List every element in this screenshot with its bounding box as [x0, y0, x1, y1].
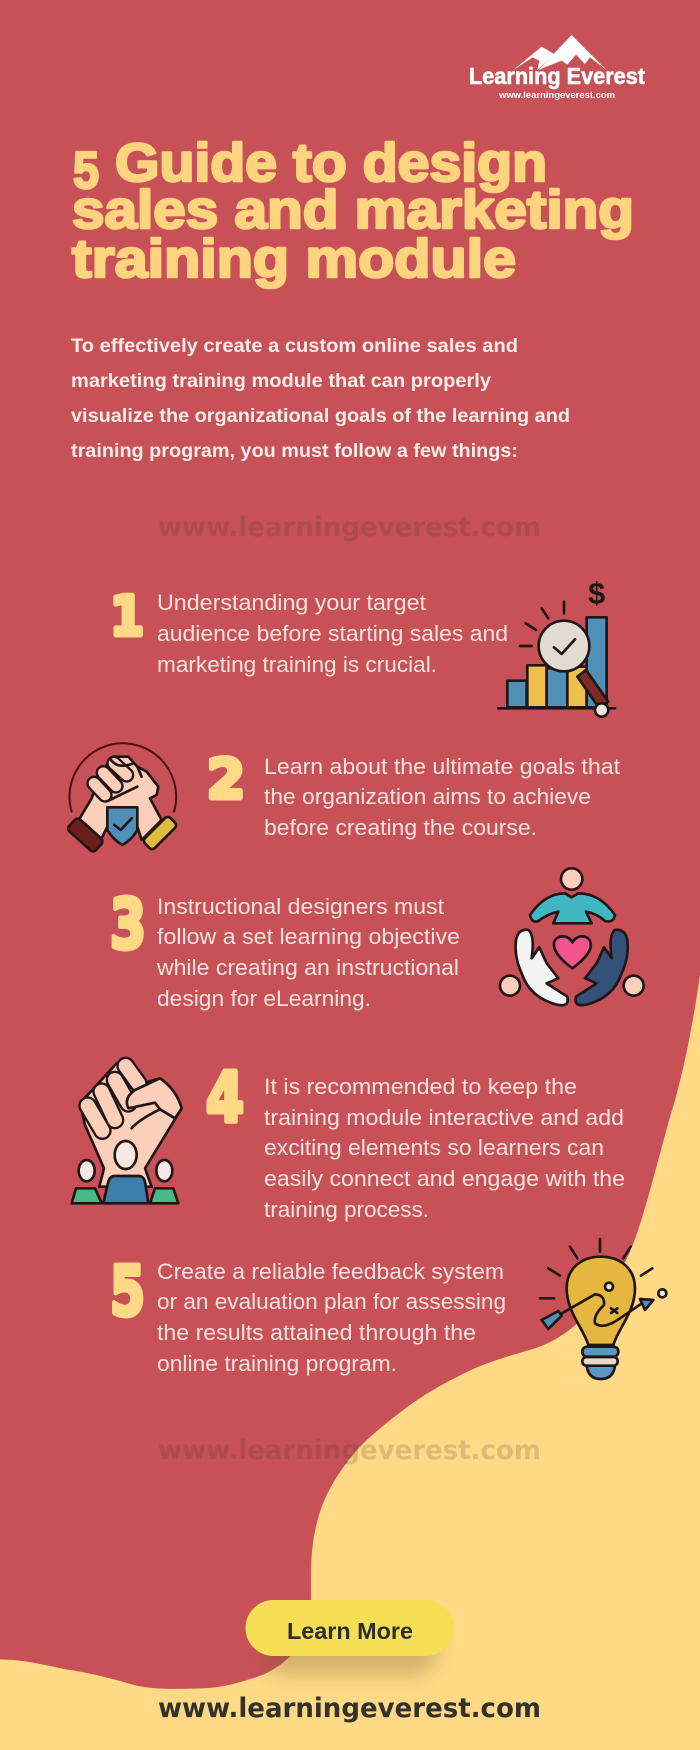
intro paragraph: visualize the organizational goals of the learning and: [71, 405, 570, 427]
logo url: www.learningeverest.com: [498, 90, 615, 100]
button: Learn More: [246, 1600, 454, 1675]
step 4 text: training process.: [264, 1197, 429, 1222]
number 2: 2: [207, 748, 245, 811]
title: [72, 133, 634, 289]
step 1 text: audience before starting sales and: [157, 621, 508, 646]
icon: bar chart with magnifier: $: [588, 576, 605, 610]
step 3 text: [156, 894, 460, 1011]
button: Learn More: Learn More: [287, 1618, 413, 1644]
intro paragraph: [71, 335, 570, 462]
step 3: [110, 868, 644, 1011]
title: training module: [72, 229, 516, 289]
step 4 text: It is recommended to keep the: [264, 1074, 577, 1099]
intro paragraph: training program, you must follow a few things:: [71, 440, 518, 462]
step 1 text: Understanding your target: [157, 590, 427, 615]
step 2: [67, 743, 621, 853]
step 2 text: Learn about the ultimate goals that: [264, 754, 621, 779]
step 5 text: [157, 1259, 506, 1376]
title: Guide to design: [115, 133, 547, 193]
step 1 text: marketing training is crucial.: [157, 652, 437, 677]
icon: clasped hands with shield: [67, 743, 178, 853]
step 5 text: or an evaluation plan for assessing: [157, 1289, 506, 1314]
step 1: [110, 576, 615, 717]
number 5: 5: [110, 1252, 145, 1332]
step 5 text: Create a reliable feedback system: [157, 1259, 504, 1284]
step 3 text: follow a set learning objective: [157, 924, 460, 949]
number 1: 1: [110, 585, 144, 648]
number 4: 4: [206, 1058, 244, 1138]
yellow wave shape: [0, 975, 700, 1750]
icon: three people around a heart: [500, 868, 644, 1005]
intro paragraph: To effectively create a custom online sales and: [71, 335, 518, 357]
icon: bar chart with magnifier: [498, 576, 615, 717]
step 1 text: [157, 590, 508, 677]
step 2 text: before creating the course.: [264, 815, 537, 840]
step 5 text: online training program.: [157, 1351, 397, 1376]
step 4 text: easily connect and engage with the: [264, 1166, 625, 1191]
title: 5: [73, 142, 99, 200]
watermark url lower: www.learningeverest.com: [158, 1435, 541, 1466]
intro paragraph: marketing training module that can properly: [71, 370, 491, 392]
title: sales and marketing: [72, 180, 634, 240]
number 3: 3: [110, 885, 146, 965]
step 4 text: exciting elements so learners can: [264, 1135, 604, 1160]
step 3 text: while creating an instructional: [156, 955, 459, 980]
watermark url top: www.learningeverest.com: [158, 512, 541, 543]
step 4: [72, 1058, 625, 1222]
step 4 text: [264, 1074, 625, 1222]
icon: light bulb with arrow: [540, 1239, 666, 1379]
step 3 text: Instructional designers must: [157, 894, 445, 919]
step 5: [110, 1239, 666, 1379]
step 2 text: the organization aims to achieve: [264, 784, 591, 809]
icon: mountain peaks: [513, 35, 607, 70]
logo name: Learning Everest: [469, 63, 645, 89]
logo: Learning Everest: [469, 35, 645, 100]
step 5 text: the results attained through the: [157, 1320, 476, 1345]
step 3 text: design for eLearning.: [157, 986, 371, 1011]
step 2 text: [264, 754, 621, 840]
footer url: www.learningeverest.com: [158, 1693, 541, 1724]
icon: raised fist with people: [72, 1063, 182, 1203]
step 4 text: training module interactive and add: [264, 1105, 624, 1130]
